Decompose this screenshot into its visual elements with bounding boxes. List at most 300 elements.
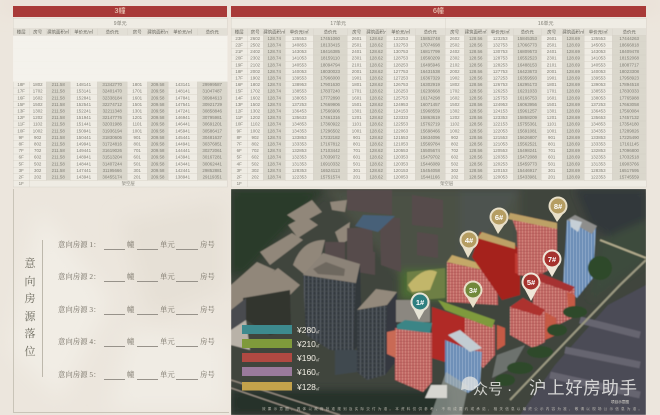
form row 1: 意向房源 1： — [58, 240, 100, 249]
price table: building 6 units 17 and 16: 128.56 — [469, 155, 482, 160]
price table: building 6 units 17 and 16: 133853 — [591, 135, 606, 140]
price table: building 3 unit 9: 301 — [134, 168, 141, 173]
price table: building 3 unit 9: 138941 — [175, 175, 190, 180]
price table: building 6 units 17 and 16: 124153 — [493, 109, 508, 114]
price table: building 6 units 17 and 16: 121553 — [393, 135, 408, 140]
price table: building 3 unit 9: 209.58 — [151, 102, 164, 107]
price table: building 6 units 17 and 16: 2402 — [450, 49, 460, 54]
price table: building 3 unit 9: 1302 — [33, 109, 43, 114]
marker 3#: 3# — [469, 286, 478, 295]
surrounding: dark residential lower right — [520, 285, 646, 415]
price table: building 6 units 17 and 16: 17901630 — [320, 82, 340, 87]
price table: building 6 units 17 and 16: 502 — [451, 161, 458, 166]
price table: building 6 units 17 and 16: 302 — [252, 168, 259, 173]
price table: building 6 units 17 and 16: 139053 — [591, 82, 606, 87]
price table: building 6 units 17 and 16: 2401 — [352, 49, 362, 54]
price table: building 6 units 17 and 16: 16517695 — [619, 168, 639, 173]
price table: building 6 units 17 and 16: 1101 — [547, 122, 556, 127]
price table: building 6 units 17 and 16: 140853 — [292, 43, 307, 48]
price table: building 6 units 17 and 16: 1801 — [352, 82, 362, 87]
price table: building 6 units 17 and 16: 16174298 — [420, 95, 440, 100]
price table: building 6 units 17 and 16: 1202 — [250, 115, 260, 120]
price table: building 6 units 17 and 16: 128753 — [493, 56, 508, 61]
form vertical title: 意 — [24, 258, 36, 270]
price table: building 6 units 17 and 16: 2401 — [547, 49, 557, 54]
price table: building 6 units 17 and 16: 128753 — [393, 56, 408, 61]
price table: building 6 units 17 and 16: 134353 — [292, 128, 307, 133]
price table: building 6 units 17 and 16: 128.69 — [566, 168, 580, 173]
price table: building 6 units 17 and 16: 125753 — [393, 95, 408, 100]
panel: intended unit form — [13, 189, 229, 413]
marker 4# — [460, 230, 478, 258]
price table: building 3 unit 9: 145441 — [175, 135, 190, 140]
price table: building 6 units 17 and 16: 128.62 — [369, 148, 383, 153]
marker 7#: 7# — [548, 255, 557, 264]
price table: building 6 units 17 and 16: 130753 — [493, 49, 508, 54]
price table: building 3 unit 9: 1201 — [132, 115, 142, 120]
price table: building 6 units 17 and 16: 单价元/㎡ — [391, 29, 410, 34]
price table: building 3 unit 9: 144441 — [175, 148, 190, 153]
form row 1: 幢 — [127, 240, 134, 249]
form vertical title: 房 — [24, 293, 36, 305]
price table: building 6 units 17 and 16: 130753 — [393, 49, 408, 54]
price table: building 3 unit 9: 209.58 — [151, 175, 164, 180]
price table: building 6 units 17 and 16: 1601 — [352, 95, 362, 100]
price table: building 6 units 17 and 16: 16910332 — [320, 161, 340, 166]
price table: building 6 units 17 and 16: 701 — [548, 148, 555, 153]
price table: building 3 unit 9: 209.58 — [151, 135, 164, 140]
watermark — [461, 377, 638, 398]
price table: building 3 unit 9: 31047487 — [202, 89, 222, 94]
price table: building 6 units 17 and 16: 楼层 — [235, 29, 244, 34]
price table: building 6 units 17 and 16: 122353 — [591, 175, 606, 180]
price table: building 3 unit 9: 3F — [19, 168, 24, 173]
buildings: low-rise podiums — [231, 200, 350, 312]
price table: building 6 units 17 and 16: 15691081 — [517, 128, 537, 133]
price table: building 3 unit 9: 143441 — [175, 161, 190, 166]
price table: building 6 units 17 and 16: 建筑面积㎡ — [465, 29, 487, 34]
price table: building 3 unit 9 — [13, 18, 227, 187]
price table: building 3 unit 9: 150441 — [76, 135, 91, 140]
price table: building 6 units 17 and 16: 120153 — [393, 168, 408, 173]
price table: building 6 units 17 and 16: 138053 — [292, 95, 307, 100]
price table: building 6 units 17 and 16: 17354180 — [619, 122, 639, 127]
price table: building 6 units 17 and 16: 128.74 — [267, 69, 281, 74]
price table: building 6 units 17 and 16: 18094794 — [320, 62, 340, 67]
price table: building 3 unit 9: 150941 — [76, 128, 91, 133]
price table: building 3 unit 9: 2F — [19, 175, 24, 180]
price table: building 6 units 17 and 16: 202 — [451, 175, 458, 180]
price table: building 6 units 17 and 16: 17289826 — [619, 128, 639, 133]
price table: building 6 units 17 and 16: 18666818 — [619, 43, 639, 48]
price table: building 6 units 17 and 16: 17232182 — [320, 135, 340, 140]
price table: building 6 units 17 and 16: 17167812 — [320, 142, 340, 146]
price table: building 6 units 17 and 16: 1502 — [250, 102, 260, 107]
price table: building 6 units 17 and 16: 128.56 — [469, 102, 482, 107]
price table: building 6 units 17 and 16: 128.56 — [469, 69, 482, 74]
price table: building 6 units 17 and 16: 17单元 — [330, 21, 346, 26]
price table: building 6 units 17 and 16: 128.56 — [469, 175, 482, 180]
price table: building 6 units 17 and 16: 2601 — [352, 36, 362, 41]
road — [510, 260, 646, 400]
price table: building 3 unit 9: 202 — [34, 175, 41, 180]
price table: building 6 units 17 and 16: 15433981 — [517, 175, 537, 180]
form row 4: 幢 — [127, 337, 134, 346]
price table: building 3 unit 9: 602 — [34, 155, 41, 160]
price table: building 3 unit 9: 211.58 — [52, 161, 65, 166]
price table: building 6 units 17 and 16: 141053 — [292, 56, 307, 61]
form row 1: 单元 — [160, 240, 175, 249]
price table: building 3 unit 9: 房号 — [133, 29, 142, 34]
price table: building 3 unit 9: 209.58 — [151, 82, 164, 87]
price table: building 6 units 17 and 16: 132753 — [393, 43, 408, 48]
price table: building 3 unit 9: 143941 — [175, 155, 190, 160]
price table: building 6 units 17 and 16: 1802 — [250, 82, 260, 87]
price table: building 6 units 17 and 16: 1902 — [450, 76, 460, 80]
price table: building 6 units 17 and 16: 2302 — [450, 56, 460, 61]
price table: building 3 unit 9: 30376851 — [202, 142, 222, 146]
price table: building 3 unit 9: 148441 — [76, 161, 91, 166]
price table: building 3 unit 9: 209.58 — [151, 128, 164, 133]
price table: building 6 units 17 and 16: 15762719 — [420, 122, 440, 127]
price table: building 6 units 17 and 16: 128.62 — [369, 49, 383, 54]
price table: building 6 units 17 and 16: 128.69 — [566, 89, 580, 94]
price table: building 6 units 17 and 16: 136453 — [292, 109, 307, 114]
price table: building 6 units 17 and 16: 128.56 — [469, 95, 482, 100]
price table: building 6 units 17 and 16: 18409478 — [619, 49, 639, 54]
price table: building 6 units 17 and 16: 128.69 — [566, 69, 580, 74]
price table: building 6 units 17 and 16: 14F — [235, 95, 243, 100]
price table: building 6 units 17 and 16: 1001 — [547, 128, 557, 133]
legend row 160: ¥160㎡ — [296, 367, 320, 377]
price table: building 3 unit 9: 151941 — [76, 115, 91, 120]
price table: building 6 units 17 and 16: 128.56 — [469, 82, 482, 87]
price table: building 6 units 17 and 16: 总价元 — [324, 29, 337, 34]
price table: building 3 unit 9: 11F — [18, 122, 25, 127]
price table: building 6 units 17 and 16: 128.74 — [267, 62, 281, 67]
price table: building 6 units 17 and 16: 总价元 — [623, 29, 636, 34]
price table: building 6 units 17 and 16: 120153 — [493, 168, 508, 173]
price table: building 6 units 17 and 16: 128.74 — [267, 175, 281, 180]
building: 4# — [447, 262, 498, 305]
price table: building 6 units 17 and 16: 16495946 — [420, 62, 440, 67]
building: central dark tower — [303, 275, 356, 352]
price table: building 6 units 17 and 16: 128.69 — [566, 155, 580, 160]
price table: building 3 unit 9: 1202 — [33, 115, 43, 120]
price table: building 6 units 17 and 16: 128.62 — [369, 89, 383, 94]
price table: building 6 units 17 and 16: 1301 — [352, 109, 362, 114]
price table: building 6 units 17 and 16: 2501 — [352, 43, 362, 48]
price table: building 6 units 17 and 16: 127753 — [493, 69, 508, 74]
price table: building 6 units 17 and 16: 17894518 — [619, 82, 639, 87]
price table: building 6 units 17 and 16: 18416385 — [320, 49, 340, 54]
price table: building 3 unit 9: 211.58 — [52, 102, 65, 107]
price table: building 6 units 17 and 16: 15863619 — [420, 115, 440, 120]
price table: building 6 units 17 and 16: 902 — [451, 135, 458, 140]
price table: building 3 unit 9: 211.58 — [52, 155, 65, 160]
price table: building 6 units 17 and 16: 134853 — [591, 122, 606, 127]
price table: building 6 units 17 and 16: 2301 — [352, 56, 362, 61]
price table: building 6 units 17 and 16: 17765988 — [619, 95, 639, 100]
form row 5: 幢 — [127, 370, 134, 379]
price table: building 3 unit 9: 1F — [19, 181, 24, 186]
price table: building 3 unit 9: 1802 — [33, 82, 43, 87]
price table: building 6 units 17 and 16: 121053 — [393, 142, 408, 146]
watermark: 众号 · — [473, 381, 512, 398]
price table: building 6 units 17 and 16: 128.69 — [566, 142, 580, 146]
marker 3# — [464, 280, 482, 308]
building: 8# — [510, 213, 557, 278]
price table: building 6 units 17 and 16: 128.62 — [369, 36, 383, 41]
price table: building 6 units 17 and 16: 128.74 — [267, 76, 281, 80]
price table: building 6 units 17 and 16: 120053 — [493, 175, 508, 180]
price table: building 6 units 17 and 16: 138953 — [292, 82, 307, 87]
form row 3: 幢 — [127, 305, 134, 314]
price table: building 6 units 17 and 16: 128.69 — [566, 128, 580, 133]
price table: building 3 unit 9: 1001 — [132, 128, 142, 133]
price table: building 3 unit 9: 143141 — [175, 82, 190, 87]
building: white-blue tower — [445, 340, 482, 393]
price table: building 6 units 17 and 16: 15459773 — [517, 161, 537, 166]
price table: building 6 units 17 and 16: 1001 — [352, 128, 362, 133]
price table: building 6 units 17 and 16: 1901 — [547, 76, 557, 80]
price table: building 6 units 17 and 16: 126753 — [393, 82, 408, 87]
price table: building 6 units 17 and 16: 128.56 — [469, 168, 482, 173]
price table: building 6 units 17 and 16: 2102 — [250, 62, 260, 67]
price table: building 6 units 17 and 16: 128.56 — [469, 122, 482, 127]
price table: building 6 units 17 and 16: 122353 — [292, 175, 307, 180]
price table: building 6 units 17 and 16: 502 — [252, 161, 259, 166]
price table: building 6 units 17 and 16: 3F — [237, 168, 242, 173]
price table: building 6 units 17 and 16: 2501 — [547, 43, 557, 48]
price table: building 6 units 17 and 16: 20F — [235, 56, 243, 61]
legend row 128: ¥128㎡ — [296, 382, 320, 392]
price table: building 6 units 17 and 16: 单价元/㎡ — [290, 29, 309, 34]
price table: building 6 units 17 and 16: 16单元 — [538, 21, 553, 26]
price table: building 3 unit 9: 30272061 — [202, 148, 222, 153]
price table: building 6 units 17 and 16: 902 — [252, 135, 259, 140]
price table: building 6 units 17 and 16: 128.69 — [566, 175, 580, 180]
marker 5#: 5# — [527, 278, 536, 287]
price table: building 3 unit 9: 601 — [134, 155, 141, 160]
price table: building 3 unit 9: 145941 — [175, 128, 190, 133]
price table: building 6 units 17 and 16: 21F — [235, 49, 243, 54]
price table: building 6 units 17 and 16: 128.69 — [566, 95, 580, 100]
price table: building 6 units 17 and 16: 501 — [548, 161, 555, 166]
price table: building 6 units 17 and 16: 801 — [353, 142, 360, 146]
price table: building 6 units 17 and 16: 2F — [237, 175, 242, 180]
price table: building 6 units 17 and 16: 140053 — [292, 69, 307, 74]
building: blue tower — [563, 220, 596, 298]
price table: building 6 units 17 and 16: 15745559 — [619, 175, 639, 180]
price table: building 6 units 17 and 16: 1501 — [547, 102, 557, 107]
price table: building 6 units 17 and 16: 137253 — [591, 102, 606, 107]
watermark: 沪上好房助手 — [529, 378, 638, 398]
price table: building 6 units 17 and 16: 17096800 — [619, 148, 639, 153]
price table: building 6 units 17 and 16: 125753 — [493, 95, 508, 100]
price table: building 6 units 17 and 16: 134353 — [591, 128, 606, 133]
price table: building 3 unit 9: 30167281 — [202, 155, 222, 160]
price table: building 6 units 17 and 16: 602 — [252, 155, 259, 160]
price table: building 6 units 17 and 16: 12F — [235, 109, 243, 114]
price table: building 3 unit 9: 501 — [134, 161, 141, 166]
form row 3: 意向房源 3： — [58, 305, 100, 314]
price table: building 6 units 17 and 16: 128.56 — [469, 89, 482, 94]
price table: building 6 units 17 and 16: 128.74 — [267, 56, 281, 61]
price table: building 6 units 17 and 16: 2002 — [250, 69, 260, 74]
price table: building 6 units 17 and 16: 128.62 — [369, 102, 383, 107]
header: building 6 — [231, 6, 646, 17]
price table: building 6 units 17 and 16: 128.62 — [369, 56, 383, 61]
price table: building 6 units 17 and 16: 123253 — [393, 36, 408, 41]
price table: building 6 units 17 and 16: 128.56 — [469, 56, 482, 61]
price table: building 3 unit 9: 209.58 — [151, 122, 164, 127]
price table: building 6 units 17 and 16: 总价元 — [424, 29, 437, 34]
price table: building 3 unit 9: 30691201 — [202, 122, 222, 127]
price table: building 6 units 17 and 16: 126253 — [493, 89, 508, 94]
price table: building 6 units 17 and 16: 15755361 — [517, 122, 537, 127]
price table: building 3 unit 9: 32274712 — [102, 102, 122, 107]
price table: building 6 units 17 and 16: 128.74 — [267, 168, 281, 173]
price table: building 6 units 17 and 16: 16423673 — [517, 69, 537, 74]
form row 4: 房号 — [200, 337, 215, 346]
price table: building 6 units 17 and 16: 128.62 — [369, 168, 383, 173]
price table: building 3 unit 9: 29999587 — [202, 82, 222, 87]
aerial site plan — [231, 189, 646, 415]
price table: building 6 units 17 and 16: 17161145 — [620, 142, 639, 146]
price table: building 6 units 17 and 16: 123353 — [493, 115, 508, 120]
price table: building 6 units 17 and 16: 122153 — [493, 122, 508, 127]
price table: building 6 units 17 and 16: 15751574 — [320, 175, 340, 180]
price table: building 6 units 17 and 16: 2301 — [547, 56, 557, 61]
form row 2 — [58, 272, 215, 282]
price table: building 6 units 17 and 16: 122553 — [393, 122, 408, 127]
price table: building 3 unit 9: 702 — [34, 148, 41, 153]
price table: building 6 units 17 and 16: 16524113 — [321, 168, 340, 173]
price table: building 3 unit 9: 31724816 — [102, 142, 122, 146]
price table: building 6 units 17 and 16: 139553 — [591, 76, 606, 80]
price table: building 6 units 17 and 16: 901 — [548, 135, 555, 140]
price table: building 6 units 17 and 16: 123253 — [493, 36, 508, 41]
price table: building 6 units 17 and 16: 128.56 — [469, 43, 482, 48]
price table: building 6 units 17 and 16: 5F — [237, 155, 242, 160]
price table: building 6 units 17 and 16: 128.69 — [566, 82, 580, 87]
price table: building 6 units 17 and 16: 128.74 — [267, 49, 281, 54]
price table: building 6 units 17 and 16: 1802 — [450, 82, 460, 87]
price table: building 3 unit 9: 架空层 — [122, 181, 135, 186]
price table: building 6 units 17 and 16: 15472088 — [517, 155, 537, 160]
price table: building 3 unit 9: 16F — [17, 95, 25, 100]
price table: building 3 unit 9: 144941 — [175, 142, 190, 146]
price table: building 6 units 17 and 16: 房号 — [352, 29, 361, 34]
price table: building 6 units 17 and 16: 122053 — [493, 128, 508, 133]
form row 1: 房号 — [200, 240, 215, 249]
price table: building 6 units 17 and 16: 1701 — [352, 89, 362, 94]
building: 3# left red — [432, 307, 465, 362]
price table: building 6 units 17 and 16: 23F — [235, 36, 243, 41]
price table: building 6 units 17 and 16: 17066773 — [517, 43, 537, 48]
form row 4: 单元 — [160, 337, 175, 346]
price table: building 6 units 17 and 16: 1301 — [547, 109, 557, 114]
price table: building 6 units 17 and 16: 16166753 — [517, 95, 537, 100]
price table: building 6 units 17 and 16: 15446089 — [420, 161, 440, 166]
price table: building 3 unit 9: 5F — [19, 161, 24, 166]
price table: building 6 units 17 and 16: 16367329 — [420, 76, 440, 80]
price table: building 3 unit 9: 31195666 — [103, 168, 122, 173]
price table: building 6 units 17 and 16: 126753 — [493, 82, 508, 87]
price table: building 3 unit 9: 建筑面积㎡ — [47, 29, 69, 34]
price table: building 6 units 17 and 16: 301 — [353, 168, 360, 173]
price table: building 6 units 17 and 16: 128.56 — [469, 62, 482, 67]
marker 7# — [542, 250, 562, 277]
price table: building 6 units 17 and 16: 143053 — [292, 49, 307, 54]
price table: building 3 unit 9: 9单元 — [114, 21, 127, 26]
price table: building 3 unit 9: 209.58 — [151, 148, 164, 153]
price table: building 6 units 17 and 16: 2002 — [450, 69, 460, 74]
price table: building 6 units 17 and 16: 17225490 — [619, 135, 639, 140]
price table: building 3 unit 9: 147841 — [175, 95, 190, 100]
price table: building 6 units 17 and 16: 架空层 — [440, 181, 453, 186]
price table: building 3 unit 9: 1801 — [132, 82, 142, 87]
price table: building 3 unit 9: 31407244 — [102, 161, 122, 166]
building: 1# — [395, 328, 432, 392]
price table: building 6 units 17 and 16: 128.69 — [566, 49, 580, 54]
price table: building 6 units 17 and 16: 19F — [235, 62, 243, 67]
price table: building 6 units 17 and 16: 9F — [237, 128, 242, 133]
form vertical title: 位 — [24, 346, 36, 358]
price table: building 6 units 17 and 16: 17837240 — [320, 89, 340, 94]
price table: building 6 units 17 and 16: 1801 — [547, 82, 557, 87]
price table: building 6 units 17 and 16: 128.62 — [369, 128, 383, 133]
price table: building 6 units 17 and 16: 138553 — [591, 89, 606, 94]
price table: building 3 unit 9: 30481637 — [202, 135, 222, 140]
price table: building 6 units 17 and 16: 1201 — [547, 115, 557, 120]
price table: building 6 units 17 and 16: 15562521 — [517, 142, 537, 146]
price table: building 6 units 17 and 16: 128.74 — [267, 155, 281, 160]
price table: building 6 units 17 and 16: 128.69 — [566, 56, 580, 61]
form row 2: 幢 — [127, 272, 134, 281]
price table: building 6 units 17 and 16: 135553 — [292, 36, 307, 41]
price table: building 3 unit 9: 楼层 — [17, 29, 26, 34]
price table: building 6 units 17 and 16: 128.74 — [267, 142, 281, 146]
price table: building 6 units 17 and 16: 17663058 — [619, 102, 639, 107]
price table: building 6 units 17 and 16: 16231033 — [517, 89, 537, 94]
price table: building 3 unit 9: 901 — [134, 135, 141, 140]
price table: building 6 units 17 and 16: 137253 — [292, 102, 307, 107]
price table: building 3 unit 9: 总价元 — [106, 29, 119, 34]
price table: building 6 units 17 and 16: 128.69 — [566, 122, 580, 127]
price table: building 6 units 17 and 16: 15961257 — [517, 109, 537, 114]
price table: building 6 units 17 and 16: 17074698 — [420, 43, 440, 48]
form vertical title: 向 — [24, 276, 36, 288]
price table: building 6 units 17 and 16: 2101 — [352, 62, 362, 67]
price table: building 3 unit 9: 211.58 — [52, 148, 65, 153]
price table: building 3 unit 9: 31936194 — [102, 128, 122, 133]
price table: building 6 units 17 and 16: 22F — [235, 43, 243, 48]
price table: building 6 units 17 and 16: 128.56 — [469, 49, 482, 54]
form row 4: 意向房源 4： — [58, 337, 100, 346]
price table: building 6 units 17 and 16: 128.74 — [267, 122, 281, 127]
price table: building 6 units 17 and 16: 132753 — [493, 43, 508, 48]
price table: building 6 units 17 and 16: 1201 — [352, 115, 362, 120]
price table: building 3 unit 9: 211.58 — [52, 95, 65, 100]
price table: building 6 units 17 and 16: 2402 — [250, 49, 260, 54]
price table: building 6 units 17 and 16: 1702 — [250, 89, 260, 94]
price table: building 6 units 17 and 16: 135653 — [591, 115, 606, 120]
price table: building 6 units 17 and 16: 18030023 — [320, 69, 340, 74]
price table: building 6 units 17 and 16: 15498241 — [517, 148, 537, 153]
price table: building 6 units 17 and 16: 15569784 — [420, 142, 440, 146]
